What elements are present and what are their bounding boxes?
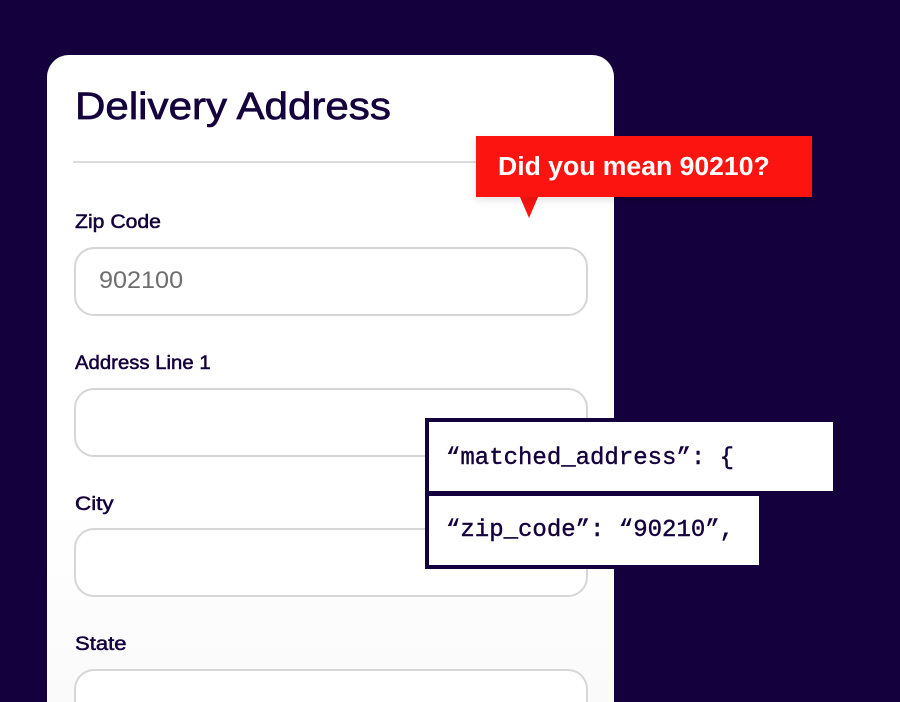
- code snippet: matched_address: [425, 418, 833, 491]
- input: zip code: [74, 247, 588, 316]
- input: state: [74, 669, 588, 702]
- label: Zip Code: Zip Code: [75, 212, 161, 233]
- label: City: City: [75, 494, 114, 515]
- input: address line 1: [74, 388, 588, 457]
- callout: Did you mean 90210?: [474, 136, 812, 218]
- input value: 902100: 902100: [99, 267, 183, 294]
- callout pointer: [520, 197, 538, 218]
- callout text: Did you mean 90210?: [498, 153, 770, 181]
- label: State: State: [75, 634, 126, 655]
- callout box: [476, 136, 812, 197]
- code snippet: matched_address: “matched_address”: {: [446, 445, 734, 472]
- code snippet: zip_code: [425, 491, 759, 569]
- input: city: [74, 528, 588, 597]
- label: Address Line 1: Address Line 1: [75, 353, 211, 374]
- code snippet: zip_code: “zip_code”: “90210”,: [446, 517, 734, 544]
- panel: delivery address form: [47, 55, 614, 702]
- heading: Delivery Address: Delivery Address: [75, 86, 391, 128]
- divider line: [73, 161, 493, 163]
